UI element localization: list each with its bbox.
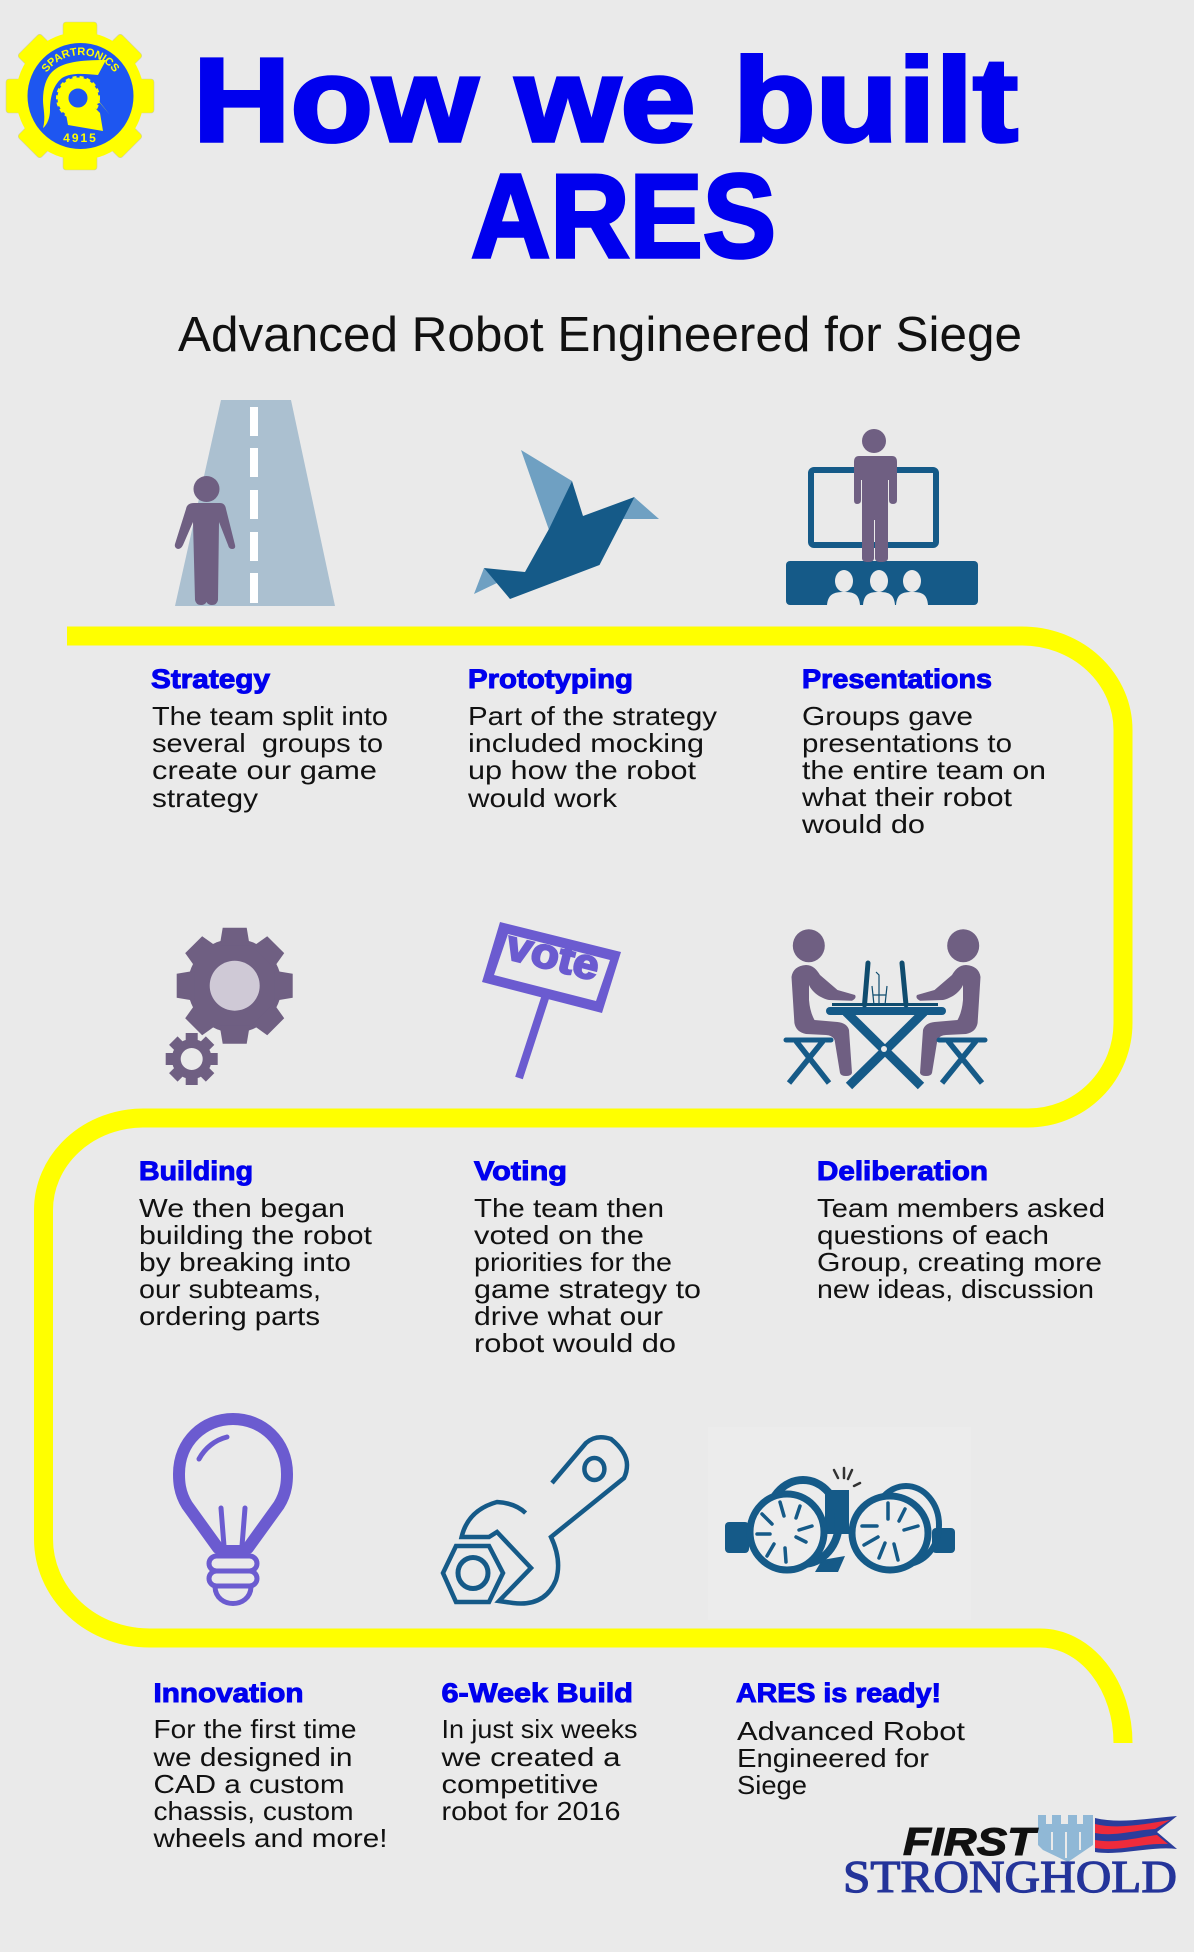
logo: Spartronics 4915 gear xyxy=(6,22,154,170)
heading: ARES is ready!: ARES is ready! xyxy=(736,1678,941,1708)
text: Deliberation description xyxy=(817,1193,1105,1304)
panel: Prototyping xyxy=(467,450,717,813)
text: Presentations description xyxy=(801,701,1046,839)
icon: origami bird xyxy=(474,450,659,599)
heading: Building: Building xyxy=(139,1156,253,1186)
icon: presenter and audience xyxy=(786,429,978,605)
text: Prototyping description: up how the robot xyxy=(468,755,697,785)
heading: 6-Week Build: 6-Week Build xyxy=(442,1678,633,1708)
text: Strategy description: strategy xyxy=(152,783,258,813)
text: Presentations description: would do xyxy=(801,809,925,839)
yellow winding path xyxy=(44,636,1123,1743)
title: How we built xyxy=(193,34,1018,167)
text: Prototyping description: included mocking xyxy=(468,728,704,758)
text: Voting description: robot would do xyxy=(474,1328,676,1358)
text: Prototyping description: would work xyxy=(467,783,618,813)
logo: FIRST Stronghold: STRONGHOLD xyxy=(843,1851,1177,1902)
text: 6-Week Build description: competitive xyxy=(442,1769,598,1799)
text: Voting description: game strategy to xyxy=(474,1274,701,1304)
text: Deliberation description: new ideas, discussion xyxy=(817,1274,1094,1304)
text: Deliberation description: Team members asked xyxy=(817,1193,1105,1223)
text: Presentations description: presentations to xyxy=(802,728,1012,758)
text: ARES description: Engineered for xyxy=(737,1743,929,1773)
heading: Innovation: Innovation xyxy=(154,1678,304,1708)
text: Prototyping description xyxy=(467,701,717,813)
text: Innovation description: chassis, custom xyxy=(154,1796,354,1826)
text: Presentations description: Groups gave xyxy=(802,701,973,731)
text: Building description xyxy=(139,1193,373,1331)
icon: vote sign: vote xyxy=(502,921,604,989)
text: Building description: building the robot xyxy=(139,1220,373,1250)
text: Innovation description: we designed in xyxy=(152,1742,352,1772)
text: 6-Week Build description xyxy=(440,1714,638,1826)
logo: FIRST Stronghold xyxy=(843,1815,1177,1902)
text: Deliberation description: questions of each xyxy=(817,1220,1049,1250)
text: 6-Week Build description: In just six weeks xyxy=(442,1714,638,1744)
text: Innovation description: For the first time xyxy=(154,1714,356,1744)
panel: ARES is ready xyxy=(708,1427,971,1800)
text: Strategy description: create our game xyxy=(152,755,377,785)
text: Presentations description: what their robot xyxy=(801,782,1013,812)
text: Building description: We then began xyxy=(139,1193,345,1223)
heading: Deliberation: Deliberation xyxy=(817,1156,988,1186)
heading: Prototyping: Prototyping xyxy=(468,664,633,694)
heading: Voting: Voting xyxy=(474,1156,567,1186)
logo: FIRST Stronghold: FIRST xyxy=(903,1821,1039,1864)
text: Prototyping description: Part of the strategy xyxy=(468,701,717,731)
panel: Voting xyxy=(474,921,701,1358)
icon: safety goggles xyxy=(708,1427,971,1620)
text: Innovation description xyxy=(152,1714,388,1853)
text: ARES description: Advanced Robot xyxy=(737,1716,966,1746)
panel: Presentations xyxy=(786,429,1046,839)
panel: Strategy xyxy=(151,400,388,813)
icon: gears xyxy=(166,928,293,1085)
subtitle: Advanced Robot Engineered for Siege xyxy=(178,308,1022,362)
text: Strategy description: several groups to xyxy=(152,728,383,758)
text: Innovation description: CAD a custom xyxy=(154,1769,344,1799)
text: 6-Week Build description: we created a xyxy=(440,1742,621,1772)
icon: light bulb xyxy=(179,1419,287,1604)
title xyxy=(193,34,1018,283)
logo: Spartronics 4915 gear: SPARTRONICS xyxy=(42,48,119,72)
text: Voting description xyxy=(474,1193,701,1358)
text: Deliberation description: Group, creating more xyxy=(817,1247,1102,1277)
icon: two people at a table xyxy=(786,929,985,1086)
text: Voting description: voted on the xyxy=(474,1220,644,1250)
text: Voting description: drive what our xyxy=(474,1301,663,1331)
text: Strategy description xyxy=(152,701,388,813)
text: Building description: our subteams, xyxy=(139,1274,321,1304)
text: Voting description: priorities for the xyxy=(474,1247,672,1277)
text: Presentations description: the entire team on xyxy=(802,755,1046,785)
panel: Innovation xyxy=(152,1419,388,1853)
panel: Deliberation xyxy=(786,929,1105,1304)
text: ARES description xyxy=(737,1716,966,1800)
text: Building description: by breaking into xyxy=(139,1247,351,1277)
panel: 6-Week Build xyxy=(440,1437,638,1826)
text: Voting description: The team then xyxy=(474,1193,664,1223)
panel: Building xyxy=(139,928,373,1331)
text: Building description: ordering parts xyxy=(139,1301,320,1331)
icon: vote sign xyxy=(482,921,621,1078)
heading: Presentations: Presentations xyxy=(802,664,992,694)
text: 6-Week Build description: robot for 2016 xyxy=(442,1796,620,1826)
text: Innovation description: wheels and more! xyxy=(152,1823,388,1853)
text: ARES description: Siege xyxy=(737,1770,807,1800)
heading: Strategy: Strategy xyxy=(151,664,270,694)
title: ARES xyxy=(471,150,776,283)
logo: Spartronics 4915 gear: 4915 xyxy=(63,131,98,145)
icon: wrench and nut xyxy=(443,1437,627,1604)
icon: road and person xyxy=(175,400,335,606)
text: Strategy description: The team split into xyxy=(152,701,388,731)
